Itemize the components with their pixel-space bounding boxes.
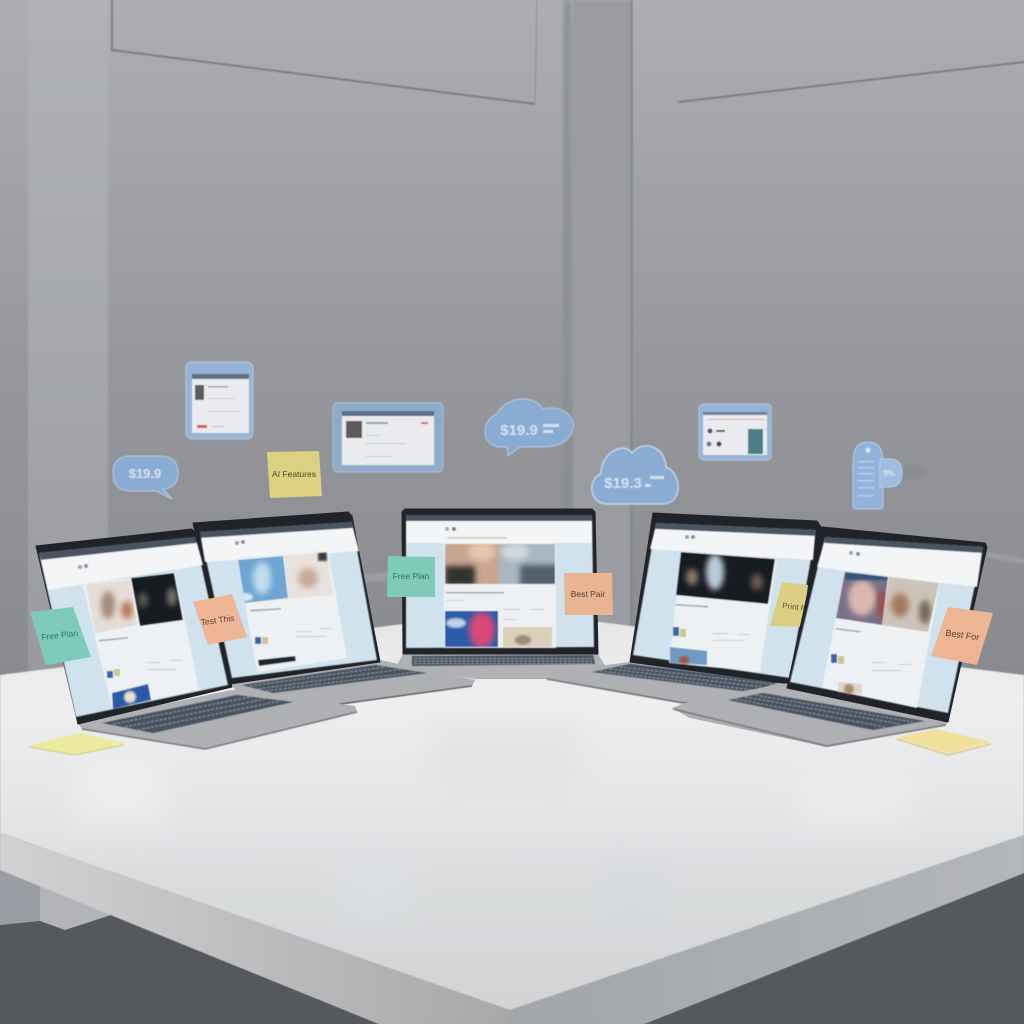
table	[0, 622, 1024, 1024]
laptop 1: far left	[36, 529, 357, 749]
laptop 1 screen	[39, 537, 228, 717]
floating card: tall	[186, 362, 253, 439]
laptop 4 keyboard	[592, 664, 780, 692]
price bubble: left: $19.9	[129, 466, 161, 481]
floating card: small right	[699, 404, 771, 460]
sticky note: Best Pair: Best Pair	[571, 589, 605, 599]
laptop 1 keyboard	[102, 695, 293, 733]
sticky note: Free Plan (centre)	[387, 556, 435, 597]
floor	[0, 873, 1024, 1024]
price cloud: right: $19.3	[604, 475, 642, 492]
laptop 3: centre	[396, 509, 606, 679]
laptop 3 base	[396, 654, 606, 679]
floating card: wide	[333, 403, 443, 472]
laptop 4 screen	[633, 523, 816, 678]
sticky note: Best Pair	[564, 573, 613, 615]
price bubble: cloud	[485, 399, 573, 456]
laptop 5: far right	[672, 527, 987, 747]
laptop 4: right of centre	[545, 513, 821, 705]
sticky note: Test This	[193, 594, 247, 645]
laptop 3 lid	[402, 509, 598, 654]
laptop 3 screen	[406, 515, 594, 648]
laptop 5 keyboard	[728, 693, 925, 730]
yellow sticky note behind laptop 5: Print fe	[782, 601, 809, 613]
laptop 2 base	[230, 660, 475, 705]
price bubble: left	[113, 456, 178, 499]
flat yellow note: right	[897, 729, 991, 755]
laptop 5 base	[672, 683, 948, 747]
laptop 4 base	[545, 662, 800, 705]
laptop 4 lid	[630, 513, 821, 684]
laptop 1 base	[77, 690, 357, 749]
laptop 2 screen	[200, 522, 377, 678]
sticky note: AI Features	[267, 451, 322, 498]
price cloud: right	[592, 446, 678, 504]
flat yellow note: left	[30, 733, 124, 755]
sticky note: Test This: Test This	[200, 613, 235, 627]
price bubble: cloud: $19.9	[500, 422, 538, 439]
price tag icon: 9%	[883, 469, 895, 478]
sticky note: Free Plan (left)	[30, 607, 91, 665]
laptop 2 lid	[193, 512, 380, 684]
laptop 2: left of centre	[193, 512, 475, 705]
laptop 5 lid	[787, 527, 987, 722]
laptop 3 keyboard	[412, 655, 595, 666]
sticky note: Best For	[931, 607, 993, 665]
yellow sticky note behind laptop 5	[770, 582, 809, 627]
sticky note: Free Plan (left): Free Plan	[41, 628, 79, 642]
price tag icon	[853, 442, 926, 509]
laptop 5 screen	[790, 537, 983, 713]
sticky note: Best For: Best For	[945, 628, 980, 642]
sticky note: AI Features: AI Features	[272, 469, 316, 479]
laptop 2 keyboard	[242, 665, 427, 693]
table reflections	[75, 720, 910, 920]
sticky note: Free Plan (centre): Free Plan	[393, 571, 430, 581]
laptop 1 lid	[36, 529, 232, 724]
